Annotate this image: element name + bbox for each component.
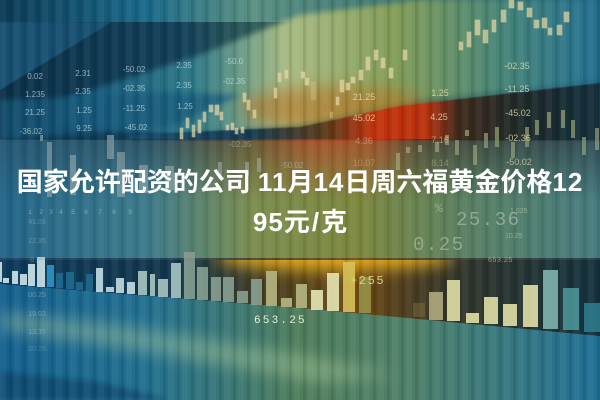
bar chart [0, 252, 600, 332]
figure: 653.25: 653.25 [254, 315, 307, 327]
small figures right: 10.25 [505, 233, 523, 240]
small figures right: 1.025 [510, 208, 528, 215]
price figures: -50.0 [225, 57, 244, 66]
price figures: centre and right: -45.02 [505, 108, 531, 118]
left lower figures: 19.03 [28, 311, 46, 318]
dark wedge with red strip [130, 83, 600, 141]
price figures: centre and right: 1.25 [431, 88, 449, 98]
figure: +255: +255 [350, 274, 385, 288]
left lower figures: 41.03 [28, 219, 46, 226]
price figures: 21.25 [25, 108, 46, 117]
candlestick chart: lower series [396, 110, 599, 170]
price figures: 0.02 [27, 72, 43, 81]
price figures: 2.35 [75, 87, 91, 96]
large figures: % [435, 201, 443, 216]
price figures: -50.02 [281, 161, 304, 170]
large figures [413, 201, 521, 256]
price figures: centre and right: 21.25 [353, 92, 375, 102]
price figures: centre and right: -50.02 [506, 157, 532, 167]
price figures: 9.25 [76, 124, 92, 133]
candlestick chart: left faint series [40, 135, 261, 197]
blue corner wedge [0, 22, 112, 90]
left lower figures: 22.35 [28, 238, 46, 245]
price figures: 1.25 [76, 106, 92, 115]
price figures: -36.02 [20, 127, 43, 136]
price figures: centre and right: -02.35 [504, 61, 530, 71]
yellow glow [208, 260, 462, 282]
price figures: -45.02 [125, 123, 148, 132]
bar chart backdrop [0, 258, 600, 336]
title band overlay [0, 140, 600, 260]
axis digits: 4 [59, 209, 63, 216]
top dark area [0, 0, 600, 140]
left lower figures: 00.25 [28, 292, 46, 299]
left lower figures: 00.25 [28, 346, 46, 353]
bottom dark corner [0, 372, 170, 400]
left lower figures: 0.25 [30, 257, 44, 264]
title: 国家允许配资的公司 11月14日周六福黄金价格12 [17, 167, 583, 197]
axis digits: 5 [71, 209, 75, 216]
left lower figures: 13.35 [28, 329, 46, 336]
price figures: centre and right: 4.25 [430, 112, 448, 122]
price figures: centre and right: -11.25 [505, 84, 529, 94]
price figures: centre and right: 8.14 [431, 158, 449, 168]
left blue band [0, 92, 240, 140]
small figures right: 653.25 [488, 257, 513, 264]
price figures: centre and right: 45.02 [353, 113, 375, 123]
axis digits: 1 [28, 209, 32, 216]
axis digits: 9 [128, 209, 132, 216]
price figures: -02.35 [123, 84, 146, 93]
price figures: -02.35 [223, 77, 246, 86]
price figures [20, 57, 304, 170]
axis digits: 6 [84, 209, 88, 216]
price figures: 1.25 [177, 102, 193, 111]
price figures: -02.35 [229, 140, 252, 149]
price figures: centre and right: -02.36 [505, 133, 531, 143]
axis digits: 7 [98, 209, 102, 216]
large figures: 0.25 [413, 234, 465, 256]
lower field [0, 280, 600, 400]
small figures right [488, 208, 528, 264]
price figures: 2.35 [176, 61, 192, 70]
price figures: centre and right [353, 61, 532, 168]
axis digits [28, 209, 132, 216]
axis digits: 3 [49, 209, 53, 216]
top strip [0, 0, 600, 22]
lower glow streak [0, 312, 400, 382]
price figures: 2.35 [176, 81, 192, 90]
price figures: centre and right: 4.36 [355, 136, 373, 146]
large figures: 25.36 [456, 209, 521, 231]
title [17, 167, 583, 237]
axis digits: 2 [39, 209, 43, 216]
price figures: 1.235 [25, 90, 46, 99]
price figures: centre and right: 7.16 [431, 135, 449, 145]
price figures: -11.25 [123, 104, 146, 113]
wedge continuing under title band [0, 139, 600, 192]
price figures: centre and right: 10.07 [353, 158, 375, 168]
left lower figures [28, 219, 46, 353]
price figures: -50.02 [123, 65, 146, 74]
axis digits: 8 [112, 209, 116, 216]
candlestick chart: upper series [180, 0, 569, 139]
rising glow band [60, 0, 600, 135]
orange glow [240, 86, 430, 130]
title: 95元/克 [253, 207, 347, 237]
price figures: 2.31 [75, 69, 91, 78]
